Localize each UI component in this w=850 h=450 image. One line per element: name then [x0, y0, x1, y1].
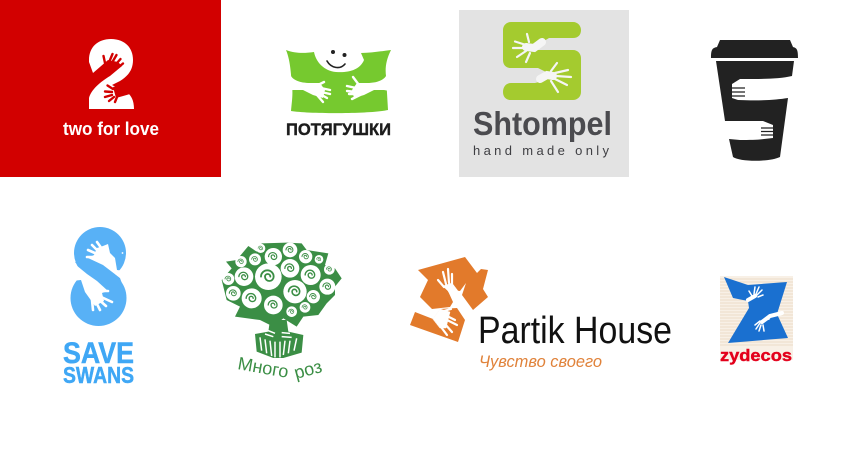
icon: lower hand — [433, 309, 457, 335]
swan S — [70, 227, 126, 326]
icon: upper hand — [104, 54, 123, 66]
striped background — [720, 276, 793, 360]
bouquet stems and hands — [255, 320, 303, 358]
logo: zydecos — [720, 276, 793, 365]
tagline: hand made only — [473, 143, 610, 158]
numeral 2 — [89, 39, 134, 109]
icon: upper hand — [438, 269, 462, 302]
wordmark: mnogo: Много — [236, 353, 290, 382]
logo: partik house — [410, 257, 672, 371]
lid — [711, 40, 798, 58]
wordmark: two for love — [63, 119, 159, 139]
pillow — [286, 50, 391, 113]
logo: two for love — [0, 0, 221, 177]
logo: mnogo roz — [222, 243, 342, 383]
wordmark: save: SAVE — [63, 337, 134, 370]
icon: right hand — [347, 72, 395, 99]
blue Z — [724, 277, 788, 343]
house lower shape — [410, 308, 465, 342]
logo: shtompel — [459, 10, 629, 177]
tagline: Чувство своего — [479, 352, 602, 371]
cup body — [716, 61, 794, 161]
icon: upper hand and neck — [87, 242, 132, 287]
icon: lower hand — [540, 63, 571, 92]
icon: upper hand fingers — [731, 88, 745, 96]
wordmark: swans: SWANS — [63, 362, 134, 388]
logo: potyagushki — [282, 50, 395, 139]
icon: upper hand — [748, 287, 763, 300]
house upper shape — [418, 257, 488, 310]
wordmark: Shtompel — [473, 105, 612, 142]
green S badge — [503, 22, 581, 100]
logo: coffee cup — [711, 40, 798, 161]
rose cluster — [222, 243, 335, 317]
icon: lower hand and gap — [62, 265, 112, 310]
icon: upper hand — [513, 34, 542, 62]
icon: lower hand — [105, 82, 134, 102]
wordmark: ПОТЯГУШКИ — [286, 120, 391, 139]
tree crown — [222, 243, 342, 327]
icon: smile face — [327, 50, 346, 68]
icon: lower hand fingers — [761, 128, 775, 135]
icon: lower hand — [755, 313, 782, 331]
icon: left hand — [282, 72, 330, 102]
wordmark: Partik House — [478, 310, 672, 352]
wordmark: roz: роз — [292, 356, 324, 383]
wordmark: zydecos — [720, 346, 792, 365]
logo: save swans — [62, 227, 134, 388]
